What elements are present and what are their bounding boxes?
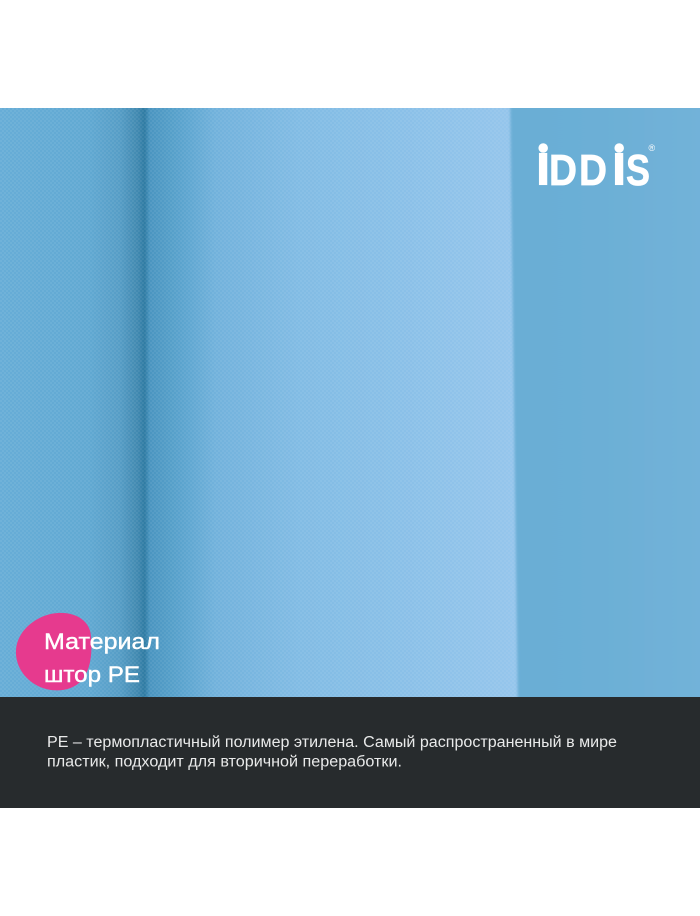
logo: IDDIS: ® [648, 143, 656, 153]
dark caption band [0, 697, 700, 808]
pink blob accent [16, 613, 91, 690]
fabric photo background [0, 90, 700, 720]
heading: material [44, 629, 160, 687]
description text: пластик, подходит для вторичной переработки. [47, 754, 402, 770]
logo: IDDIS: D [549, 146, 577, 195]
logo: IDDIS: S [626, 146, 650, 195]
logo: IDDIS: D [579, 146, 607, 195]
infographic canvas [0, 108, 700, 808]
heading: material: штор PE [44, 662, 140, 687]
heading: material: Материал [44, 629, 160, 654]
description text: PE – термопластичный полимер этилена. Самый распространенный в мире [47, 734, 617, 751]
description text [47, 734, 617, 770]
logo: IDDIS [539, 143, 656, 195]
